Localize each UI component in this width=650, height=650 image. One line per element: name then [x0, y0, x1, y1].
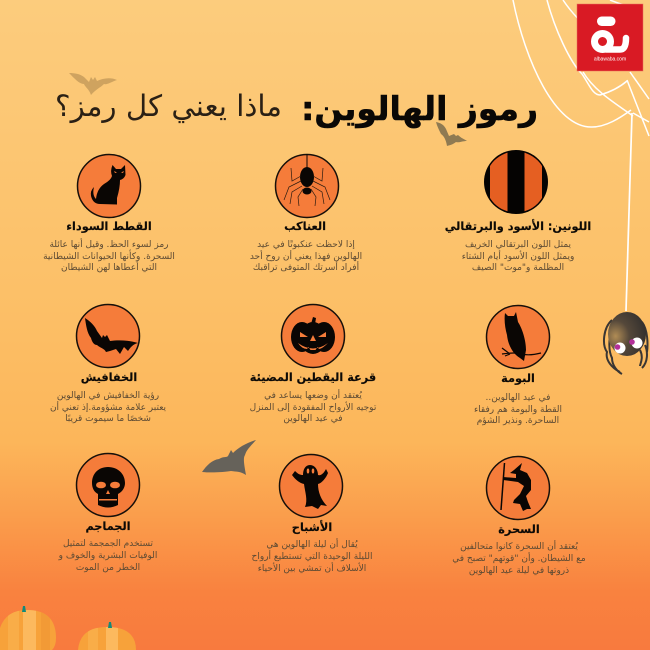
panel: black cat [43, 154, 175, 273]
description: يُعتقد أن السحرة كانوا متحالفين [460, 540, 578, 552]
bat: grey centre [202, 440, 256, 475]
description: الأسلاف أن تمشي بين الأحياء [258, 562, 366, 574]
bat: faint top left [69, 73, 117, 95]
icon: jack-o-lantern [282, 304, 344, 368]
icon: bat [76, 304, 140, 368]
description: أفراد أسرتك المتوفى تراقبك [253, 261, 359, 273]
description: يعتبر علامة مشؤومة.إذ تعني أن [50, 401, 167, 413]
description: الليلة الوحيدة التي تستطيع أرواح [252, 550, 372, 562]
description: السحرة. وكأنها الحيوانات الشيطانية [43, 249, 175, 262]
heading: العناكب [284, 220, 326, 233]
description: في عيد الهالوين [283, 414, 343, 424]
logo [577, 4, 643, 71]
heading: الأشباح [292, 520, 332, 534]
description: يُقال أن ليلة الهالوين هي [266, 538, 358, 550]
description: الوفيات البشرية والخوف و [58, 551, 157, 561]
heading: البومة [501, 372, 535, 385]
icon: skull [76, 454, 140, 516]
description [58, 539, 157, 573]
icon: cat [78, 154, 140, 218]
description [474, 393, 562, 426]
icon: striped circle [484, 150, 548, 214]
description: الخطر من الموت [76, 563, 140, 573]
description: توجيه الأرواح المفقودة إلى المنزل [250, 401, 377, 413]
description [50, 391, 167, 424]
description: القطة والبومة هم رفقاء [474, 405, 562, 415]
description: مع الشيطان. وأن "قوتهم" تصبح في [452, 552, 586, 564]
description: التي أعطاها لهن الشيطان [61, 261, 157, 273]
icon: owl [486, 306, 550, 368]
description: شخصًا ما سيموت قريبًا [65, 414, 151, 424]
hanging spider [604, 312, 647, 374]
panel: owl [474, 306, 562, 426]
icon: spider [276, 154, 338, 218]
description: تستخدم الجمجمة لتمثيل [63, 539, 154, 549]
heading: قرعة اليقطين المضيئة [250, 371, 376, 384]
description: يُعتقد أن وضعها يساعد في [264, 389, 362, 401]
icon: logo mark [594, 16, 626, 50]
description: في عيد الهالوين.. [486, 393, 550, 403]
panel: witches [452, 456, 586, 576]
description: إذا لاحظت عنكبوتًا في عيد [257, 240, 355, 250]
panel: glowing pumpkin [250, 304, 377, 424]
panel: skulls [58, 454, 157, 573]
description: الهالوين فهذا يعني أن روح أحد [250, 250, 362, 262]
description: المظلمة و"موت" الصيف [472, 263, 564, 273]
description: رؤية الخفافيش في الهالوين [57, 391, 159, 401]
icon: ghost [280, 454, 342, 518]
description [452, 540, 586, 576]
panel: spiders [250, 154, 362, 273]
heading: القطط السوداء [66, 220, 152, 233]
description [462, 240, 574, 273]
description [43, 238, 175, 273]
panel: ghosts [252, 454, 372, 574]
icon: witch [486, 456, 550, 520]
description: رمز لسوء الحظ. وقيل أنها عائلة [49, 238, 169, 250]
panel: bats [50, 304, 167, 424]
heading: السحرة [498, 523, 540, 536]
description: ذروتها في ليلة عيد الهالوين [469, 566, 569, 576]
title: ماذا يعني كل رمز؟ [55, 89, 282, 124]
panel: black and orange [445, 150, 591, 273]
title: رموز الهالوين: [301, 89, 538, 129]
bat: near title [436, 122, 467, 146]
title [55, 89, 538, 129]
pumpkin: right [78, 622, 136, 650]
description [252, 538, 372, 574]
logo wordmark: albawaba.com [594, 56, 626, 62]
description: يمثل اللون البرتقالي الخريف [465, 240, 572, 250]
heading: الجماجم [85, 520, 131, 533]
description: الساحرة. ونذير الشؤم [477, 416, 559, 426]
pumpkin: left [0, 606, 56, 650]
decorative spider web [513, 0, 649, 311]
description: ويمثل اللون الأسود أيام الشتاء [462, 250, 574, 262]
heading: الخفافيش [81, 371, 137, 384]
description [250, 389, 377, 424]
heading: اللونين: الأسود والبرتقالي [445, 219, 591, 233]
description [250, 240, 362, 273]
